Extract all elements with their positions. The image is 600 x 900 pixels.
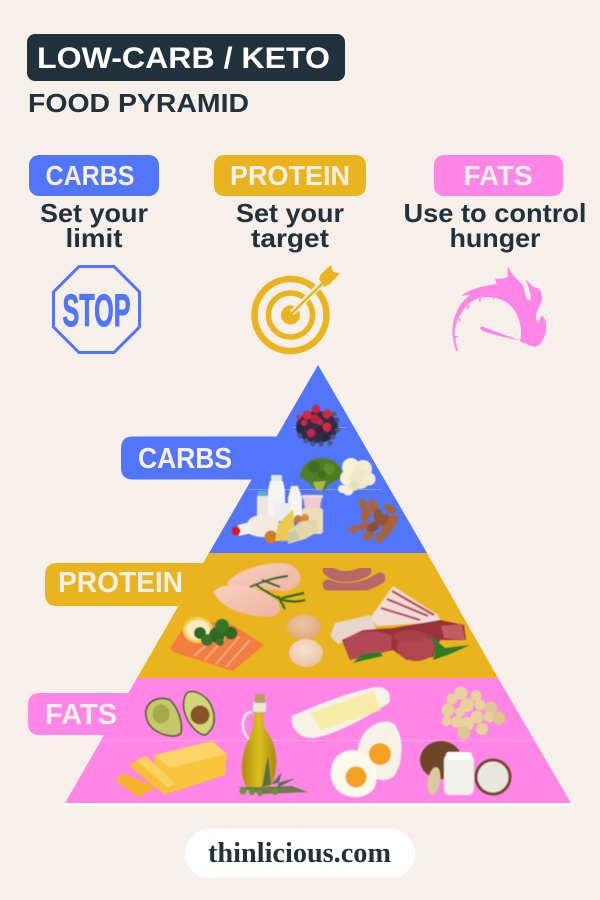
column: protein: PROTEIN xyxy=(230,160,350,191)
pyramid xyxy=(28,365,572,806)
food: macadamia nuts xyxy=(442,686,506,740)
icon: stop sign: STOP xyxy=(62,285,130,336)
pyramid tier: protein xyxy=(45,553,498,678)
pyramid tier: carbs xyxy=(121,365,427,553)
column: fats xyxy=(404,155,586,352)
column: carbs: CARBS xyxy=(46,160,134,191)
icon: flaming speedometer xyxy=(452,267,546,352)
label: carbs: CARBS xyxy=(138,443,232,475)
food: sausages xyxy=(328,570,380,588)
icon: target xyxy=(254,265,340,351)
food: salmon xyxy=(170,617,264,671)
food: berries xyxy=(296,405,340,446)
column: fats: Use to control xyxy=(404,198,586,228)
food: coconut and jar xyxy=(420,741,512,796)
column: carbs xyxy=(29,155,159,352)
pyramid tier: fats xyxy=(28,678,572,806)
column: carbs: Set your xyxy=(40,198,148,228)
food: olive oil bottle xyxy=(237,694,308,796)
column: fats: hunger xyxy=(450,223,540,253)
food: cheese xyxy=(116,741,227,797)
food: broccoli xyxy=(300,458,342,491)
food: cauliflower xyxy=(338,458,376,496)
food: chicken xyxy=(213,563,305,617)
column: protein: Set your xyxy=(236,198,344,228)
label: protein: PROTEIN xyxy=(58,567,183,599)
food: eggs xyxy=(287,614,323,667)
column: fats: FATS xyxy=(464,160,532,191)
column: protein: target xyxy=(251,223,329,253)
food: red meat xyxy=(330,586,470,663)
food: dairy group xyxy=(232,475,323,544)
logo pill xyxy=(185,829,415,878)
icon: stop sign xyxy=(54,266,140,352)
logo pill: thinlicious.com xyxy=(208,837,391,869)
food: butter dish xyxy=(292,687,390,738)
column: protein xyxy=(214,155,366,351)
label: fats: FATS xyxy=(45,699,117,731)
food: fried eggs xyxy=(331,722,402,797)
food: avocado xyxy=(146,692,214,736)
food: almonds xyxy=(347,498,401,544)
title: LOW-CARB / KETO xyxy=(37,42,330,75)
column: carbs: limit xyxy=(66,223,123,253)
title xyxy=(27,34,345,81)
subtitle: FOOD PYRAMID xyxy=(28,88,249,118)
